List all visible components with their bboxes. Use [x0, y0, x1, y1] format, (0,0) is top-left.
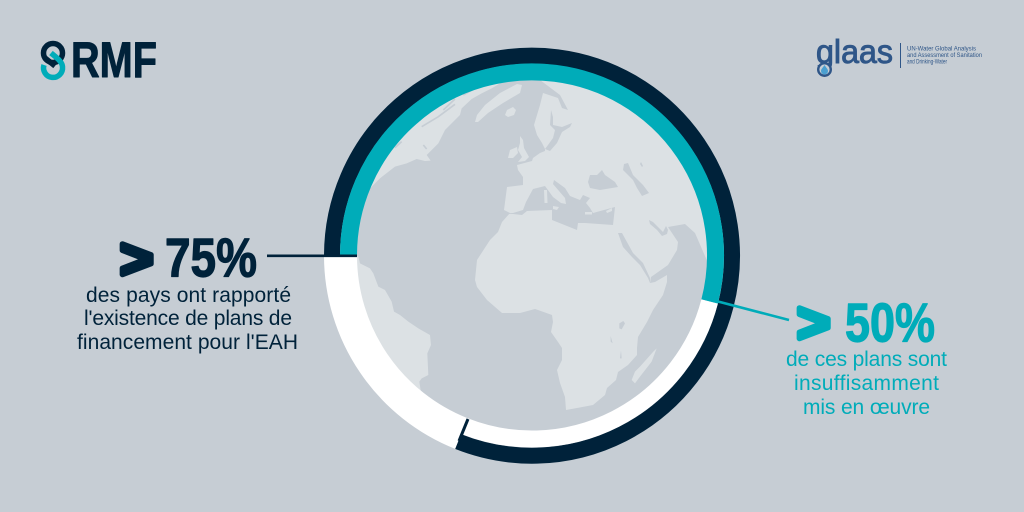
ring: inner white arc — [465, 302, 710, 439]
statistic: over 50 percent: 50% — [845, 292, 935, 354]
land: Madagascar and African lakes — [611, 321, 657, 383]
logo wordmark: RMF — [71, 32, 157, 88]
logo descriptor: and Drinking-Water — [907, 58, 948, 66]
glaas wordmark: glaas — [816, 33, 893, 70]
logo descriptor: and Assessment of Sanitation — [907, 52, 982, 59]
text: 75 percent description: l'existence de plans de — [84, 307, 292, 330]
land: Europe, Asia and Africa — [475, 80, 707, 410]
logo divider — [900, 43, 901, 68]
text: 50 percent description: de ces plans sont — [786, 348, 947, 371]
text: 75 percent description — [77, 284, 298, 354]
statistic: over 75 percent — [120, 226, 257, 291]
statistic: over 75 percent: 75% — [165, 226, 257, 288]
land: North America — [371, 84, 500, 187]
ring: inner teal arc — [348, 72, 716, 302]
islands: Mediterranean — [544, 190, 612, 214]
text: 50 percent description: insuffisamment — [794, 372, 939, 395]
logo: GLAAS — [816, 33, 982, 76]
logo descriptor: UN-Water Global Analysis — [907, 46, 977, 52]
text: 50 percent description — [786, 348, 947, 419]
ring: lower-left white segment — [340, 256, 461, 434]
ring divider — [459, 419, 468, 441]
text: 75 percent description: financement pour l'EAH — [77, 331, 298, 354]
sea: Mediterranean — [500, 180, 615, 230]
sea: Black Sea, Caspian, Aral, Baltic, Red Sea, Persian Gulf — [545, 110, 668, 283]
statistic: over 50 percent: > — [797, 291, 830, 355]
icon: water drop in ring — [818, 63, 831, 76]
text: 75 percent description: des pays ont rapporté — [86, 284, 291, 307]
logo descriptor — [907, 46, 982, 66]
logo: SRMF — [44, 32, 157, 88]
statistic: over 75 percent: > — [120, 227, 153, 291]
land: South America — [357, 256, 431, 390]
text: 50 percent description: mis en œuvre — [803, 396, 930, 419]
land: Britain, Ireland, Iceland, Greenland — [475, 84, 529, 162]
leader line: 50% — [718, 302, 789, 320]
ring: outer dark arc — [332, 56, 732, 456]
leader line: 75% — [267, 255, 357, 257]
icon: linked rings — [44, 44, 63, 77]
globe map — [357, 80, 707, 410]
statistic: over 50 percent — [797, 291, 935, 355]
